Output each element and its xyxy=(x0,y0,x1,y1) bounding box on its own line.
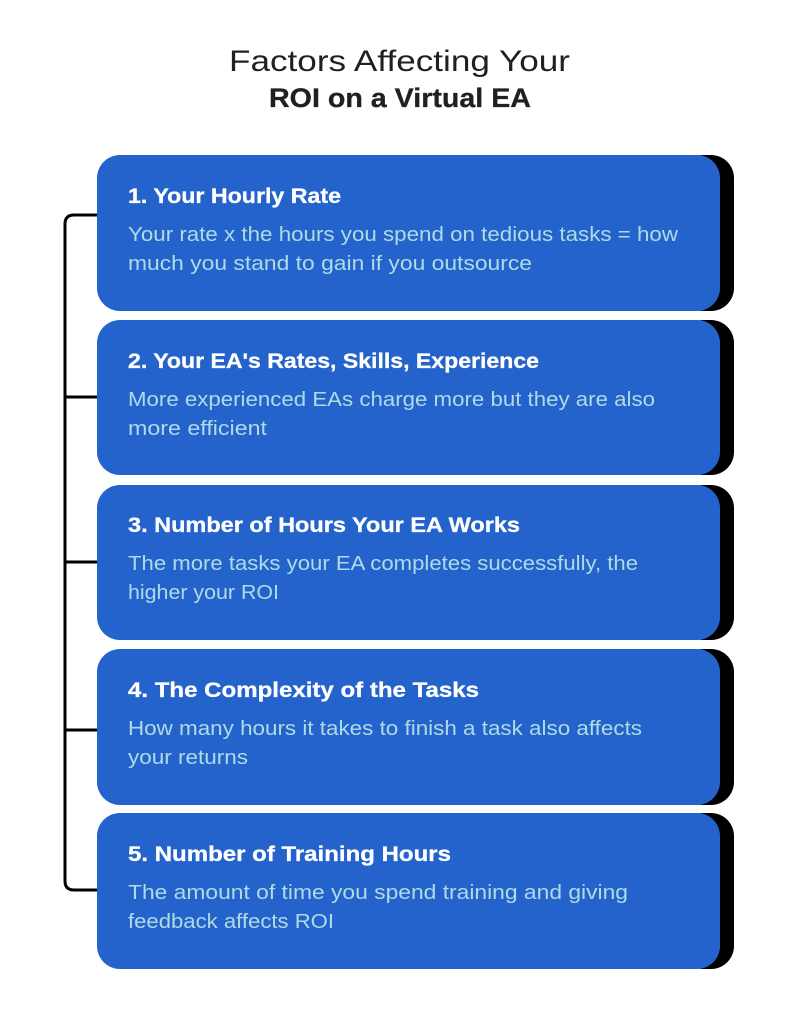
panel: the complexity of the tasks: 4. The Complexity of the Tasks xyxy=(128,678,479,702)
title xyxy=(229,45,570,113)
panel: your hourly rate: Your rate x the hours you spend on tedious tasks = how xyxy=(128,223,678,246)
panel: your hourly rate: 1. Your Hourly Rate xyxy=(128,184,341,208)
panel: number of training hours: feedback affects ROI xyxy=(128,910,334,933)
panel: number of hours your EA works: 3. Number of Hours Your EA Works xyxy=(128,513,520,537)
panel: number of training hours xyxy=(97,813,734,969)
panel: your hourly rate xyxy=(97,155,734,311)
connector bracket xyxy=(65,215,98,890)
panel: the complexity of the tasks: How many hours it takes to finish a task also affects xyxy=(128,717,642,740)
panel: the complexity of the tasks: your returns xyxy=(128,746,248,769)
title: Factors Affecting Your xyxy=(229,45,570,78)
panel: the complexity of the tasks xyxy=(97,649,734,805)
panel: number of hours your EA works: The more tasks your EA completes successfully, the xyxy=(128,552,638,575)
panel: your EA's rates, skills, experience: 2. Your EA's Rates, Skills, Experience xyxy=(128,349,539,373)
panel: your EA's rates, skills, experience: More experienced EAs charge more but they are also xyxy=(128,388,655,411)
panel: number of hours your EA works: higher your ROI xyxy=(128,581,279,604)
panel: number of training hours: The amount of time you spend training and giving xyxy=(128,881,628,904)
panel: your EA's rates, skills, experience: more efficient xyxy=(128,417,267,440)
panel: number of hours your EA works xyxy=(97,485,734,640)
panel: your hourly rate: much you stand to gain if you outsource xyxy=(128,252,532,275)
title: ROI on a Virtual EA xyxy=(269,83,531,113)
panel: number of training hours: 5. Number of Training Hours xyxy=(128,842,451,866)
panel: your EA's rates, skills, experience xyxy=(97,320,734,475)
